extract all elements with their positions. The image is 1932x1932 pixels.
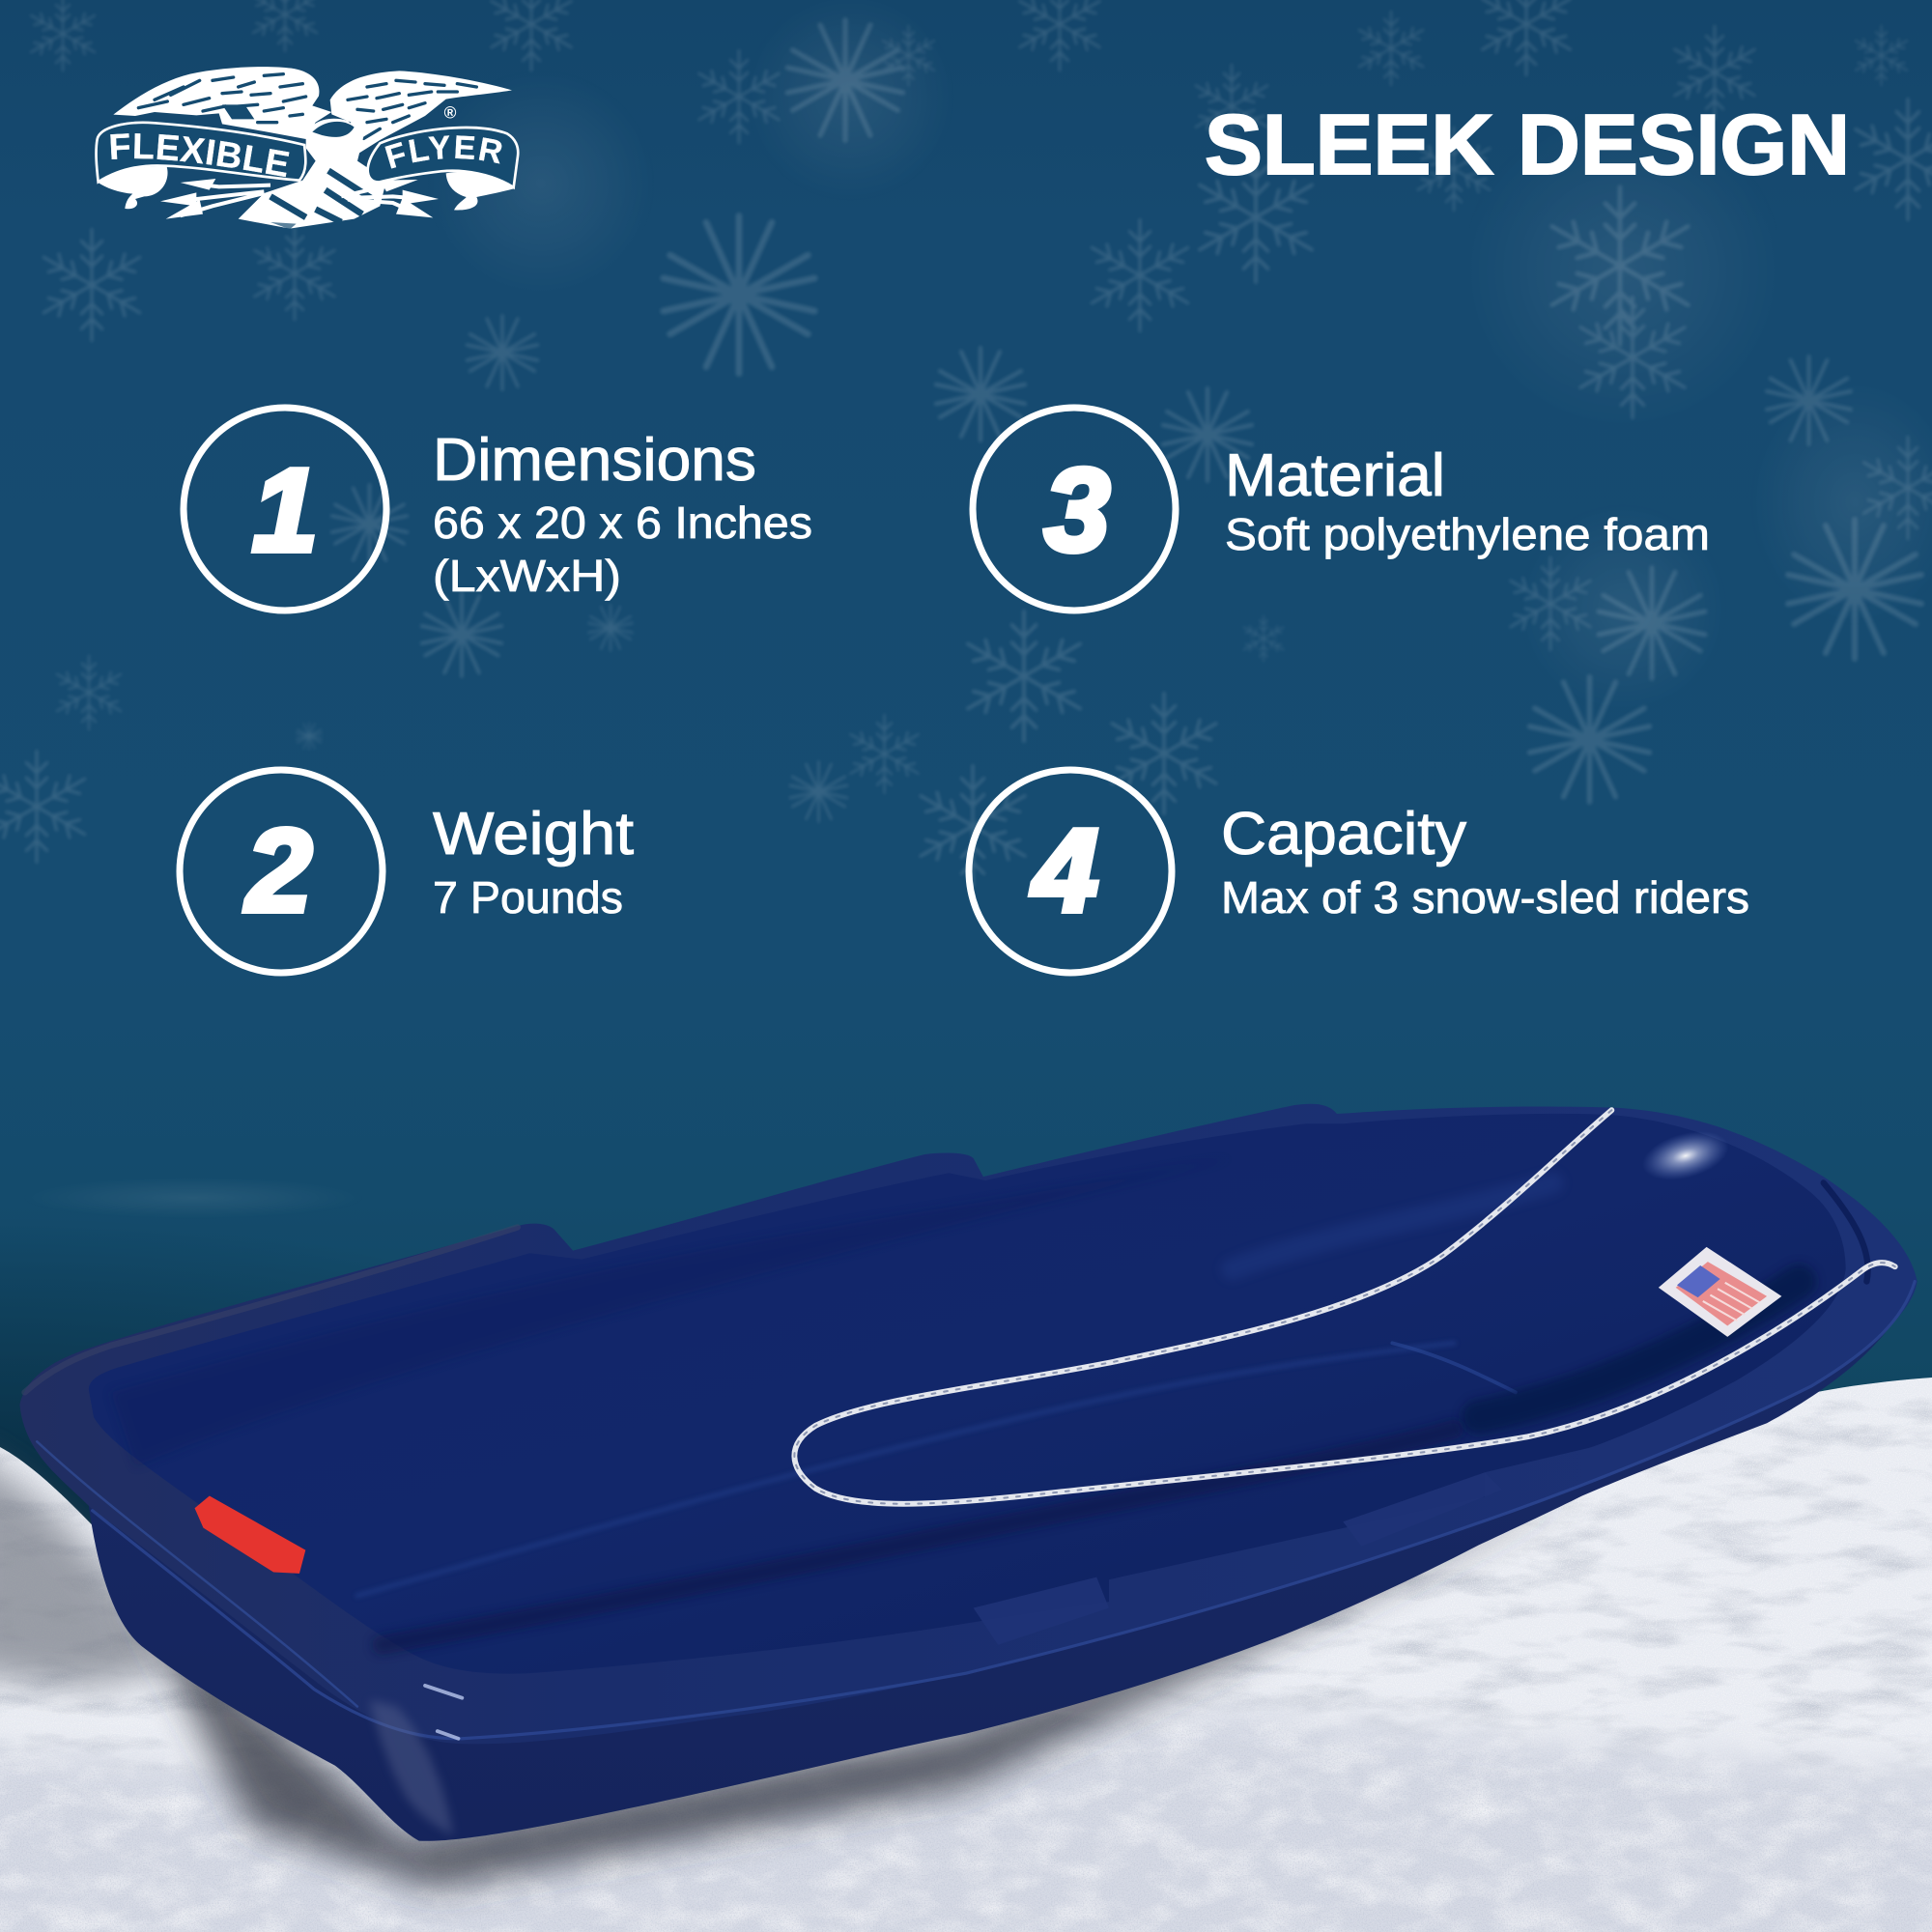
tow rope	[794, 1110, 1895, 1504]
brand word FLEXIBLE: FLEXIBLE	[110, 133, 290, 178]
feature 1: dimensions	[184, 408, 812, 611]
right ribbon	[367, 126, 520, 211]
brand word FLYER: FLYER	[384, 135, 502, 168]
heading: Capacity: Capacity	[1221, 801, 1466, 867]
background: darker lower-left vignette	[0, 1217, 773, 1797]
sled inner shading	[111, 1158, 1233, 1466]
body: dimensions value: 66 x 20 x 6 Inches	[433, 497, 812, 548]
right wing	[330, 71, 512, 156]
front snow drift	[0, 1703, 1932, 1932]
feature 3: material	[973, 408, 1710, 611]
heading: Weight: Weight	[433, 801, 634, 867]
number badge 4: 4	[1030, 805, 1098, 936]
number badge 3	[973, 408, 1176, 611]
title: SLEEK DESIGN	[1205, 97, 1850, 192]
left wing	[113, 67, 331, 139]
number badge 1	[184, 408, 386, 611]
sled corner sheen	[370, 1700, 453, 1836]
sled rim notches	[974, 1472, 1502, 1645]
feature 4: capacity	[969, 770, 1749, 973]
registered mark: ®	[444, 103, 457, 123]
body: weight value: 7 Pounds	[433, 872, 623, 923]
USA flag patch	[1659, 1247, 1781, 1337]
heading: Material: Material	[1225, 442, 1445, 509]
left ribbon	[95, 122, 307, 209]
background snowflakes	[0, 0, 1932, 1219]
sled hull	[89, 1282, 1914, 1841]
body: capacity value: Max of 3 snow-sled riders	[1221, 872, 1749, 923]
sled rim	[19, 1104, 1918, 1744]
body: dimensions axes: (LxWxH)	[433, 551, 621, 601]
sled	[19, 1104, 1918, 1841]
number badge 3: 3	[1044, 444, 1110, 576]
grey shaded snow at left	[0, 1449, 164, 1685]
feature 2: weight	[180, 770, 634, 973]
sled shadow on snow	[126, 1488, 1584, 1889]
logo: Flexible Flyer eagle	[95, 67, 520, 229]
heading: Dimensions: Dimensions	[433, 427, 756, 494]
left ribbon tail	[98, 167, 168, 209]
number badge 4	[969, 770, 1172, 973]
number badge 2	[180, 770, 383, 973]
number badge 2: 2	[244, 805, 312, 936]
specular highlight	[1637, 1122, 1734, 1188]
red tag	[195, 1495, 305, 1574]
sled basin	[89, 1114, 1846, 1674]
sled floor ribs	[357, 1182, 1868, 1645]
number badge 1: 1	[252, 444, 318, 576]
snow bank behind sled	[0, 1378, 1932, 1835]
sled rim highlights	[25, 1227, 1915, 1739]
arrows	[160, 179, 439, 219]
body: material value: Soft polyethylene foam	[1225, 509, 1710, 559]
eagle body and shield	[239, 119, 386, 229]
right ribbon tail	[446, 172, 515, 210]
